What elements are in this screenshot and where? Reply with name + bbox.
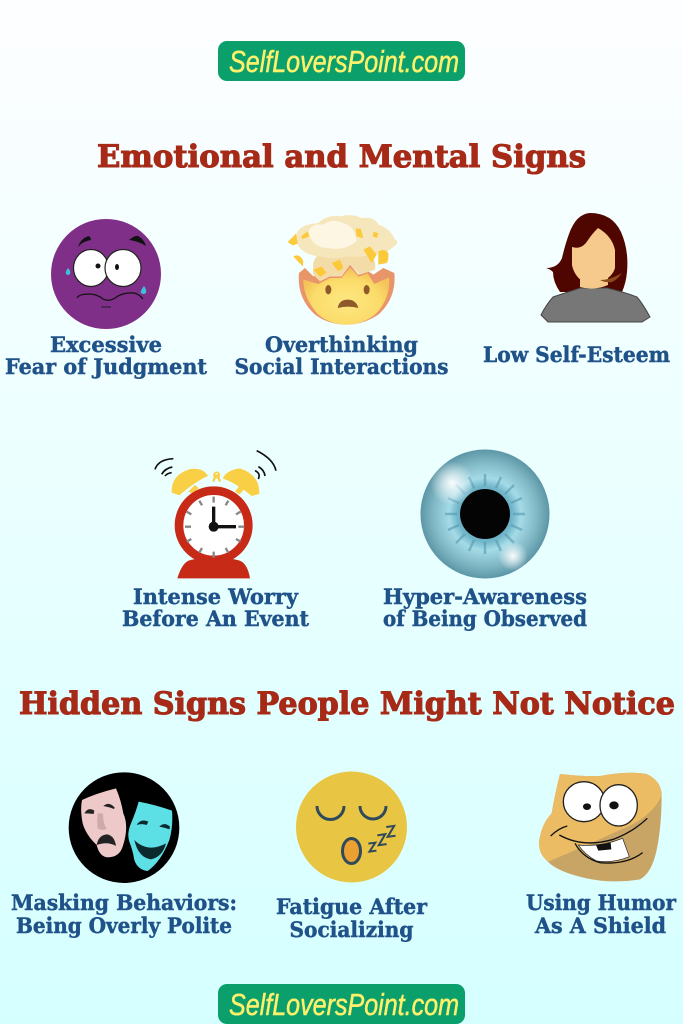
icon: theatre masks bbox=[69, 772, 179, 883]
icon: eye bbox=[420, 450, 550, 578]
heading: Hidden Signs People Might Not Notice: Hidden Signs People Might Not Notice bbox=[19, 686, 675, 722]
label: As A Shield bbox=[534, 913, 666, 938]
label: Social Interactions bbox=[234, 354, 448, 379]
label: Hyper-Awareness bbox=[383, 584, 587, 609]
label: Fatigue After bbox=[276, 894, 428, 919]
label: of Being Observed bbox=[383, 606, 587, 631]
label: Excessive bbox=[50, 332, 162, 357]
label: Using Humor bbox=[526, 890, 677, 915]
icon: laughing blob bbox=[539, 773, 662, 881]
icon: alarm clock bbox=[155, 451, 276, 578]
label: Low Self-Esteem bbox=[483, 342, 670, 367]
top logo badge: SelfLoversPoint.com bbox=[229, 44, 459, 79]
item: Overthinking Social Interactions bbox=[234, 215, 448, 379]
label: Intense Worry bbox=[133, 584, 299, 609]
item: Low Self-Esteem bbox=[483, 213, 670, 367]
icon: woman portrait bbox=[541, 213, 650, 322]
label: Before An Event bbox=[122, 606, 309, 631]
item: Fatigue After Socializing bbox=[276, 772, 428, 942]
label: Fear of Judgment bbox=[5, 354, 207, 379]
icon: sleeping face bbox=[296, 772, 407, 882]
item: Hyper-Awareness of Being Observed bbox=[383, 450, 587, 631]
icon: worried purple face bbox=[51, 219, 161, 329]
item: Excessive Fear of Judgment bbox=[5, 219, 207, 379]
item: Intense Worry Before An Event bbox=[122, 451, 309, 631]
label: Overthinking bbox=[265, 332, 418, 357]
label: Socializing bbox=[290, 917, 414, 942]
label: Masking Behaviors: bbox=[11, 890, 237, 915]
bottom logo badge: SelfLoversPoint.com bbox=[229, 987, 459, 1022]
label: Being Overly Polite bbox=[16, 913, 232, 938]
icon: exploding head emoji bbox=[288, 215, 397, 325]
item: Masking Behaviors bbox=[11, 772, 237, 938]
heading: Emotional and Mental Signs: Emotional and Mental Signs bbox=[97, 139, 586, 175]
item: Using Humor As A Shield bbox=[526, 773, 677, 938]
